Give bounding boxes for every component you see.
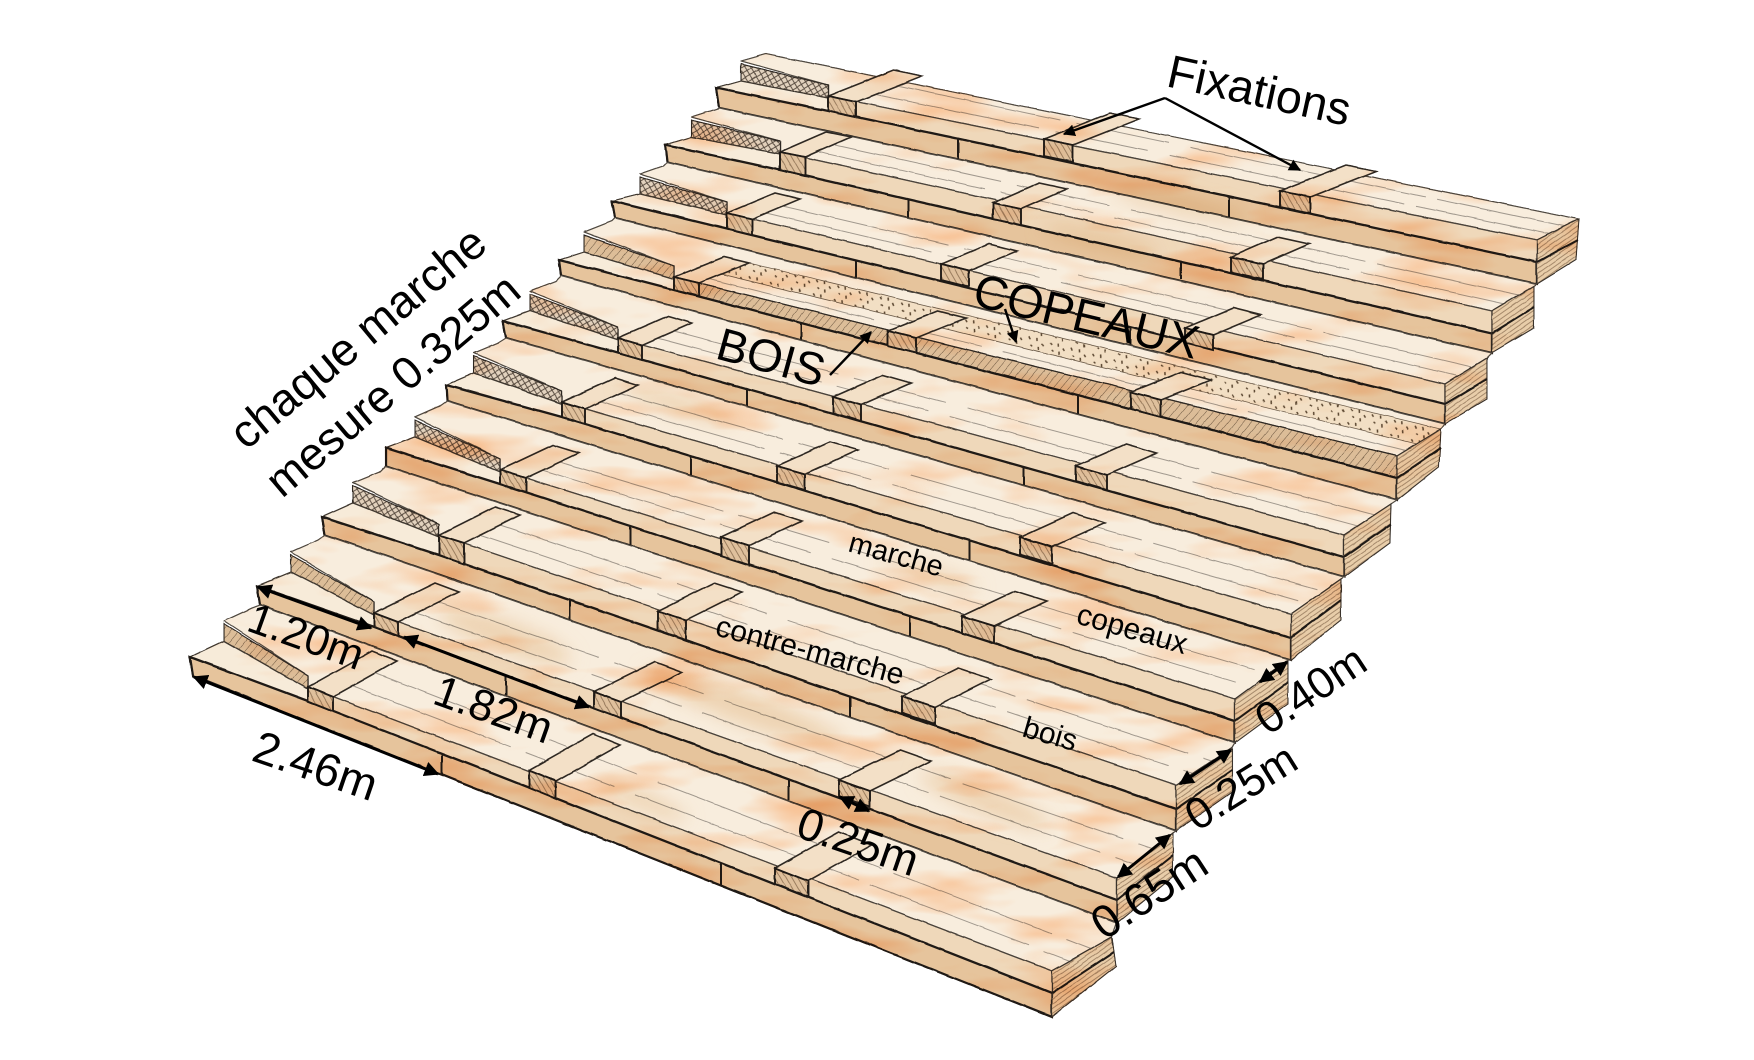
dimension label: 2.46m: 2.46m	[247, 720, 385, 811]
dimension arrow: 0.25m depth	[1180, 750, 1231, 784]
dimension arrow: 0.65m	[1118, 835, 1170, 877]
step 1 (bottom)	[190, 605, 1117, 1017]
step 2	[257, 535, 1176, 923]
dimension label: 0.25m width: 0.25m	[791, 797, 926, 886]
label: chaque marche: chaque marche	[219, 216, 496, 459]
step 7: chips (copeaux) fill	[559, 218, 1445, 500]
label: marche: marche	[845, 527, 947, 584]
dimension label: 1.20m: 1.20m	[242, 594, 370, 680]
dimension label: 0.65m: 0.65m	[1081, 836, 1217, 949]
dimension arrow: 0.25m width	[840, 797, 869, 811]
step 4	[386, 401, 1291, 743]
dimension arrow: 1.20m	[258, 587, 371, 628]
dimension label: 0.40m: 0.40m	[1246, 636, 1375, 744]
arrow: BOIS	[830, 332, 871, 375]
label: BOIS: BOIS	[711, 318, 831, 397]
step 3	[322, 466, 1235, 831]
wood colour patches	[434, 183, 1250, 838]
dimension arrow: 1.82m	[404, 637, 589, 707]
dimension arrow: 0.40m	[1260, 662, 1287, 682]
step 6	[503, 276, 1397, 577]
label: mesure 0.325m: mesure 0.325m	[256, 264, 530, 507]
step 10 (top)	[716, 54, 1579, 284]
step 9	[665, 108, 1537, 353]
step 8	[612, 162, 1492, 424]
wooden staircase illustration	[190, 54, 1579, 1017]
dimension arrow: 2.46m	[194, 677, 438, 774]
label: copeaux: copeaux	[1073, 598, 1191, 661]
dimension label: 0.25m depth: 0.25m	[1176, 734, 1306, 840]
dimension label: 1.82m: 1.82m	[428, 666, 559, 753]
arrow: COPEAUX	[1005, 309, 1016, 342]
label: COPEAUX: COPEAUX	[969, 263, 1205, 369]
label: Fixations: Fixations	[1163, 45, 1356, 136]
step 5	[446, 338, 1344, 660]
arrows: Fixations	[1064, 98, 1300, 170]
label: bois: bois	[1019, 711, 1081, 758]
label: contre-marche: contre-marche	[712, 610, 908, 692]
